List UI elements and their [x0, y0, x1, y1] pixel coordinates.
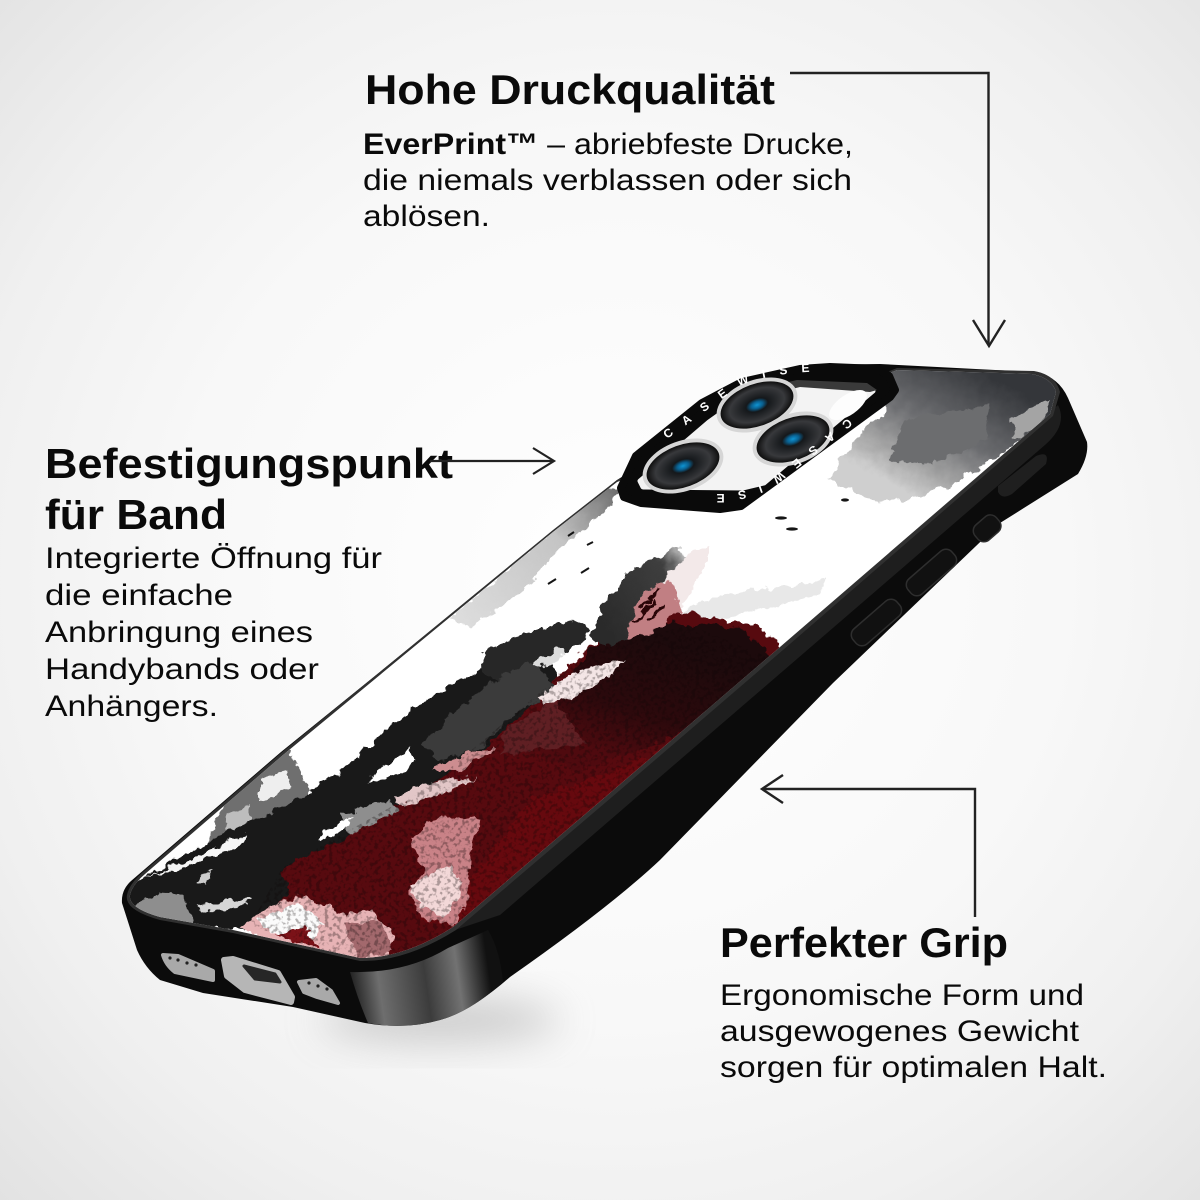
- callout: print quality: [363, 66, 853, 233]
- white gaps: [367, 748, 415, 782]
- birds: [548, 498, 849, 584]
- crimson cloth: [278, 610, 780, 955]
- drop shadow: [320, 998, 560, 1042]
- camera bumper: [621, 367, 895, 509]
- action button: [848, 596, 905, 649]
- lower cloth: [243, 897, 395, 965]
- white base: [130, 370, 1056, 958]
- pale cloth streaks: [430, 750, 495, 772]
- lens right: [745, 401, 841, 477]
- description: ausgewogenes Gewicht: [720, 1015, 1080, 1048]
- bottom ports: [163, 955, 338, 1003]
- heading: Befestigungspunkt: [45, 440, 453, 487]
- description: sorgen für optimalen Halt.: [720, 1051, 1107, 1084]
- case body: [122, 364, 1087, 1026]
- camera window: [640, 383, 873, 488]
- description: Anbringung eines: [45, 616, 313, 649]
- arrow: to side edge: [762, 775, 975, 917]
- left speaker: [163, 955, 213, 980]
- description: die niemals verblassen oder sich: [363, 164, 852, 197]
- lower left rocks: [138, 893, 192, 925]
- grey body: [420, 660, 560, 760]
- side buttons: [848, 454, 1047, 649]
- heading: Perfekter Grip: [720, 919, 1008, 966]
- side vent: [998, 454, 1047, 497]
- description: Ergonomische Form und: [720, 979, 1084, 1012]
- case brand lower: CASEWISE: [717, 420, 852, 502]
- phone case illustration: [122, 363, 1088, 1059]
- pale mist: [680, 578, 825, 625]
- inner shade: [745, 380, 877, 400]
- arrow: to top edge: [790, 73, 1005, 346]
- case brand upper: CASEWISE: [664, 364, 810, 438]
- side highlight band: [455, 405, 1061, 930]
- helmet: [590, 548, 690, 648]
- smoke clouds: [828, 370, 1056, 504]
- lens top: [709, 367, 805, 443]
- corner highlight: [350, 930, 503, 1026]
- power button: [970, 512, 1004, 545]
- chest highlight: [535, 658, 622, 705]
- right speaker: [299, 980, 338, 1003]
- callout: lanyard: [45, 440, 453, 723]
- description: [720, 979, 1107, 1084]
- description: Anhängers.: [45, 690, 218, 723]
- printed artwork: [130, 370, 1056, 958]
- arm band: [483, 620, 590, 683]
- raised rim: [127, 368, 1060, 961]
- description: Handybands oder: [45, 653, 319, 686]
- volume button: [903, 546, 960, 599]
- dark cloth texture: [250, 625, 775, 965]
- heading: [45, 440, 453, 538]
- description: die einfache: [45, 579, 233, 612]
- flash: [824, 384, 872, 426]
- heading: Hohe Druckqualität: [365, 66, 775, 113]
- description: [363, 128, 853, 233]
- description: [45, 542, 382, 723]
- heading: für Band: [45, 491, 227, 538]
- black cloak lower left: [130, 662, 557, 930]
- callout: grip: [720, 919, 1107, 1084]
- midriff mottling: [500, 700, 585, 755]
- rocks upper left: [205, 750, 310, 850]
- description: EverPrint™ – abriebfeste Drucke,: [363, 128, 853, 161]
- grey edge smear: [450, 482, 625, 627]
- charging port: [224, 959, 292, 1002]
- lens left: [635, 428, 731, 504]
- dark torso: [558, 620, 770, 758]
- pink highlights: [408, 815, 480, 925]
- description: Integrierte Öffnung für: [45, 542, 382, 575]
- description: ablösen.: [363, 200, 490, 233]
- arrow: to lanyard hole: [430, 448, 554, 474]
